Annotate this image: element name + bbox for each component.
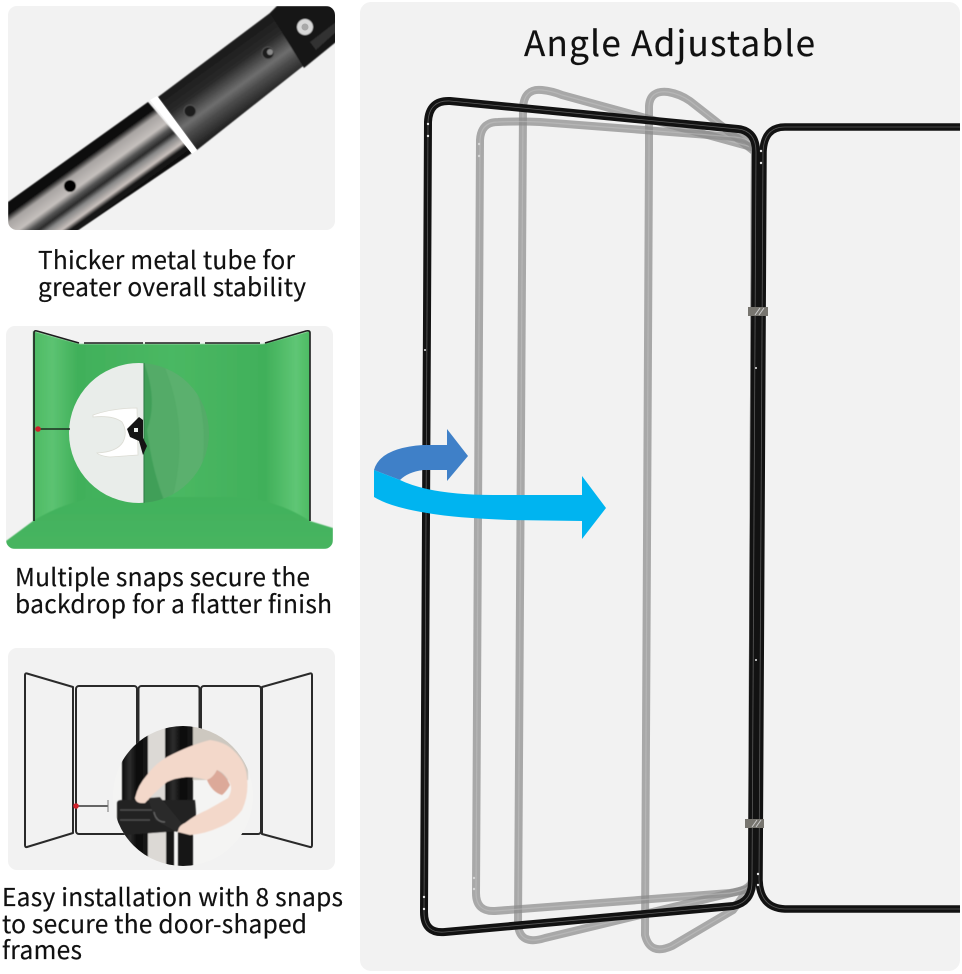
red callout marker <box>35 426 70 432</box>
green backdrop <box>6 331 333 549</box>
caption: easy installation: to secure the door-shaped <box>2 906 307 941</box>
caption: easy installation: Easy installation with 8 snaps <box>2 879 343 914</box>
detail circle with snap <box>69 363 210 504</box>
upper black tube <box>158 6 336 150</box>
caption: easy installation: frames <box>2 932 82 967</box>
caption: metal tube <box>38 242 306 304</box>
panel: angle adjustable <box>360 2 960 971</box>
caption: snaps: Multiple snaps secure the <box>15 559 310 594</box>
black fixed frame <box>759 127 960 909</box>
heading: Angle Adjustable <box>524 16 815 67</box>
hole in lower tube <box>64 180 76 192</box>
panel: thicker metal tube photo <box>8 6 336 231</box>
frame clips <box>745 307 768 828</box>
five frames <box>25 673 312 847</box>
lower silver tube <box>8 102 192 231</box>
screw <box>297 19 313 35</box>
caption: snaps <box>15 559 332 621</box>
panel: door-shaped frames with hand detail <box>8 648 335 870</box>
ghost frame: near position <box>476 122 755 911</box>
arrow back segment <box>374 429 468 481</box>
rotation arrow <box>374 429 606 539</box>
panel: green backdrop with snap detail <box>6 326 333 549</box>
backdrop frame <box>34 331 310 521</box>
caption: metal tube: Thicker metal tube for <box>38 242 295 277</box>
caption: snaps: backdrop for a flatter finish <box>15 586 332 621</box>
white clip <box>93 408 138 457</box>
caption: metal tube: greater overall stability <box>38 269 306 304</box>
caption: easy installation <box>2 879 343 967</box>
black snap <box>127 417 147 455</box>
black rotating frame <box>424 101 756 932</box>
arrow front segment <box>374 470 606 539</box>
white separator band <box>150 96 197 154</box>
frame screw holes <box>423 123 762 910</box>
hand <box>135 740 247 835</box>
strap <box>117 800 196 835</box>
detail circle: hand on snap <box>113 725 253 867</box>
ghost frame: far position <box>645 92 755 949</box>
red callout marker <box>73 800 108 812</box>
ghost frame: middle position <box>518 90 755 940</box>
